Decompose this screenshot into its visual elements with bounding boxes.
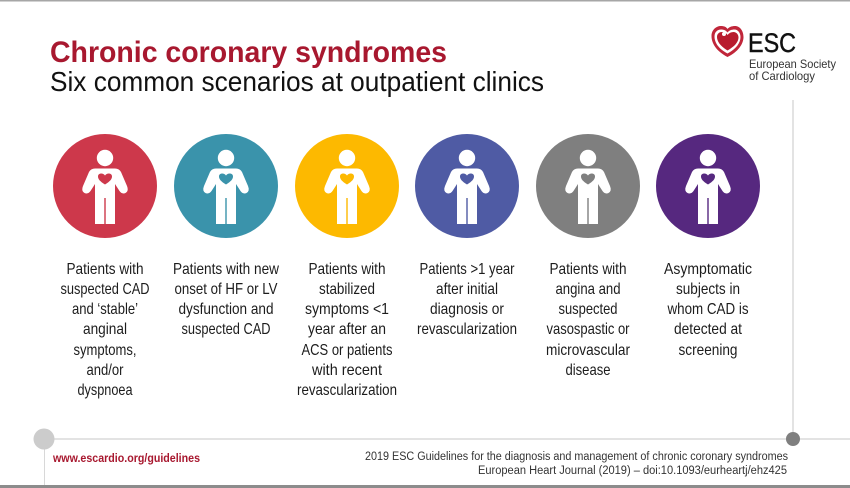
timeline dot: right <box>786 432 800 446</box>
text: scenario 1: and ‘stable’ <box>72 301 138 318</box>
text: scenario 1: suspected CAD <box>60 281 150 298</box>
text: scenario 3: ACS or patients <box>302 342 392 359</box>
subtitle: Six common scenarios at outpatient clinics <box>50 66 544 97</box>
text: scenario 2: onset of HF or LV <box>174 281 278 298</box>
text: scenario 2: dysfunction and <box>178 301 274 318</box>
text: scenario 6: screening <box>678 342 738 359</box>
text: scenario 4: after initial <box>436 281 498 298</box>
text: scenario 3: Patients with <box>308 261 386 278</box>
text: scenario 4: Patients >1 year <box>420 261 515 278</box>
citation: 2019 ESC Guidelines for the diagnosis and management of chronic coronary syndromes <box>365 451 788 463</box>
scenario 6 <box>656 134 760 359</box>
timeline dot: left <box>34 428 54 450</box>
text: scenario 5: disease <box>566 362 611 379</box>
scenario 1 <box>53 134 157 399</box>
scenario 4 <box>415 134 519 338</box>
text: scenario 6: detected at <box>674 321 742 338</box>
text: scenario 3: year after an <box>308 321 386 338</box>
text: scenario 5: vasospastic or <box>546 321 630 338</box>
scenario 2 <box>173 134 279 338</box>
text: scenario 6: whom CAD is <box>667 301 748 318</box>
text: scenario 5 <box>546 261 631 379</box>
icon: patient on red circle <box>53 134 157 238</box>
text: scenario 3: symptoms <1 <box>305 301 389 318</box>
icon: patient on grey circle <box>536 134 640 238</box>
icon: heart <box>712 26 744 57</box>
text: scenario 1: Patients with <box>66 261 144 278</box>
text: scenario 6: subjects in <box>676 281 740 298</box>
text: scenario 3: with recent <box>311 362 382 379</box>
text: scenario 4: revascularization <box>417 321 517 338</box>
ESC logo <box>712 26 836 83</box>
text: scenario 5: microvascular <box>546 342 631 359</box>
text: scenario 3: revascularization <box>297 382 397 399</box>
ESC logo: ESC <box>748 28 796 58</box>
text: scenario 5: angina and <box>556 281 620 298</box>
text: scenario 3 <box>297 261 397 399</box>
text: scenario 6: Asymptomatic <box>664 261 752 278</box>
ESC logo: European Society <box>749 57 836 71</box>
text: scenario 1 <box>60 261 150 399</box>
ESC logo: of Cardiology <box>749 69 815 83</box>
citation: European Heart Journal (2019) – doi:10.1093/eurheartj/ehz425 <box>478 465 787 477</box>
website link: www.escardio.org/guidelines <box>52 453 200 465</box>
text: scenario 2: Patients with new <box>173 261 279 278</box>
text: scenario 1: symptoms, <box>74 342 136 359</box>
text: scenario 5: Patients with <box>550 261 626 278</box>
icon: patient on purple circle <box>656 134 760 238</box>
text: scenario 5: suspected <box>558 301 618 318</box>
icon: patient on yellow circle <box>295 134 399 238</box>
text: scenario 4 <box>417 261 517 338</box>
text: scenario 1: dyspnoea <box>78 382 133 399</box>
title: Chronic coronary syndromes <box>50 36 447 69</box>
text: scenario 3: stabilized <box>319 281 375 298</box>
citation <box>365 451 788 477</box>
title <box>50 36 544 97</box>
scenario 3 <box>295 134 399 399</box>
text: scenario 1: anginal <box>83 321 127 338</box>
icon: patient on blue circle <box>415 134 519 238</box>
scenario 5 <box>536 134 640 379</box>
text: scenario 4: diagnosis or <box>430 301 505 318</box>
text: scenario 6 <box>664 261 752 359</box>
text: scenario 1: and/or <box>86 362 124 379</box>
text: scenario 2: suspected CAD <box>182 321 270 338</box>
text: scenario 2 <box>173 261 279 338</box>
icon: patient on teal circle <box>174 134 278 238</box>
